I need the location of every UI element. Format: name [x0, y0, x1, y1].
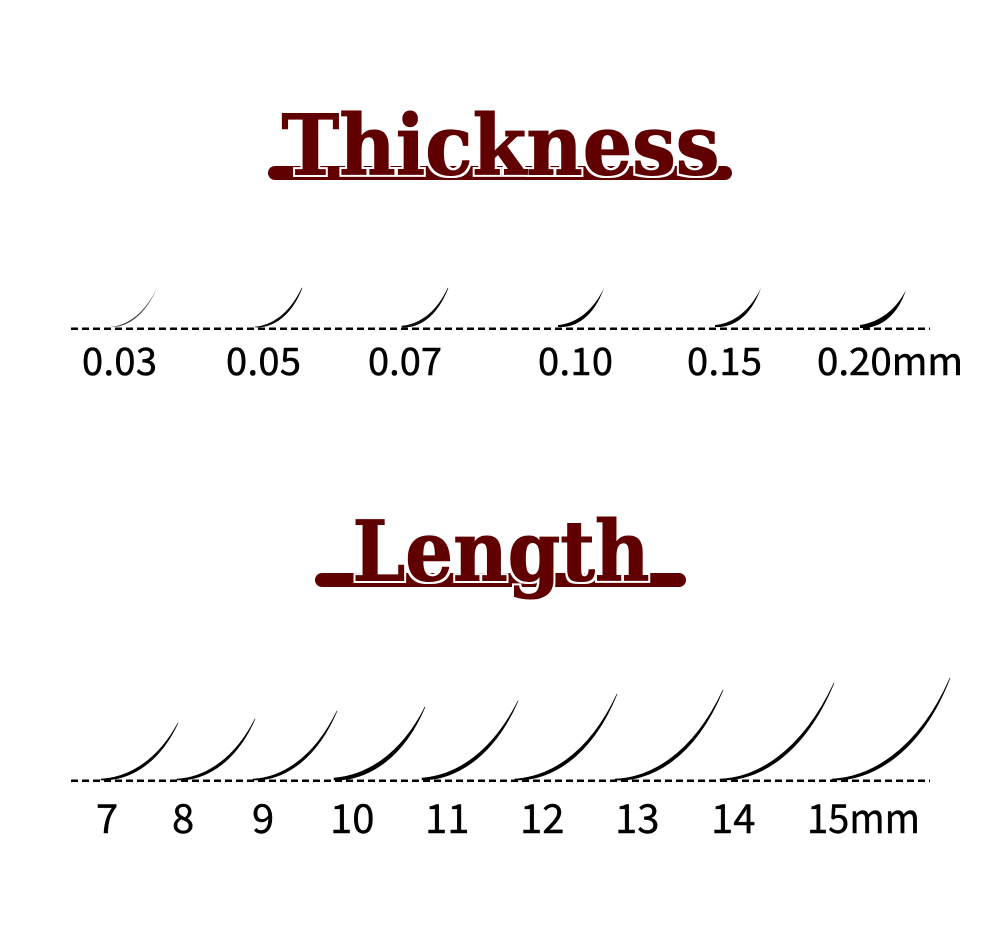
heading: Thickness: Thickness — [282, 96, 720, 194]
label: 0.10: 0.10 — [538, 331, 613, 386]
panel: length scale — [71, 678, 950, 845]
lash: 15 — [832, 678, 950, 780]
lash: 0.03 — [110, 288, 157, 327]
label: 7: 7 — [96, 787, 118, 845]
lash: 0.10 — [558, 288, 604, 327]
label: 0.15: 0.15 — [687, 331, 762, 386]
label: 0.03: 0.03 — [82, 331, 157, 386]
label: 12: 12 — [520, 787, 564, 845]
lash: 11 — [422, 701, 518, 780]
lash: 12 — [515, 694, 617, 780]
label: 0.07: 0.07 — [368, 331, 442, 386]
lash: 0.20 — [860, 290, 906, 328]
label: 13: 13 — [615, 787, 659, 845]
label: 0.20mm: 0.20mm — [817, 331, 963, 386]
label: 8: 8 — [172, 787, 194, 845]
lash: 13 — [615, 690, 723, 780]
lash: 0.15 — [715, 288, 761, 327]
lash: 0.07 — [402, 288, 448, 327]
lash: 7 — [101, 723, 178, 780]
label: 0.05: 0.05 — [226, 331, 301, 386]
lash: 8 — [177, 719, 255, 780]
label: 11: 11 — [425, 787, 469, 845]
label: 15mm: 15mm — [807, 787, 920, 845]
label: 10: 10 — [330, 787, 374, 845]
label: 9: 9 — [252, 787, 274, 845]
lash: 14 — [720, 683, 834, 780]
label: 14: 14 — [711, 787, 755, 845]
lash: 9 — [253, 711, 337, 780]
panel: thickness scale — [71, 288, 963, 386]
heading: Length: Length — [352, 502, 650, 600]
lash: 10 — [334, 707, 425, 780]
lash: 0.05 — [255, 288, 302, 327]
